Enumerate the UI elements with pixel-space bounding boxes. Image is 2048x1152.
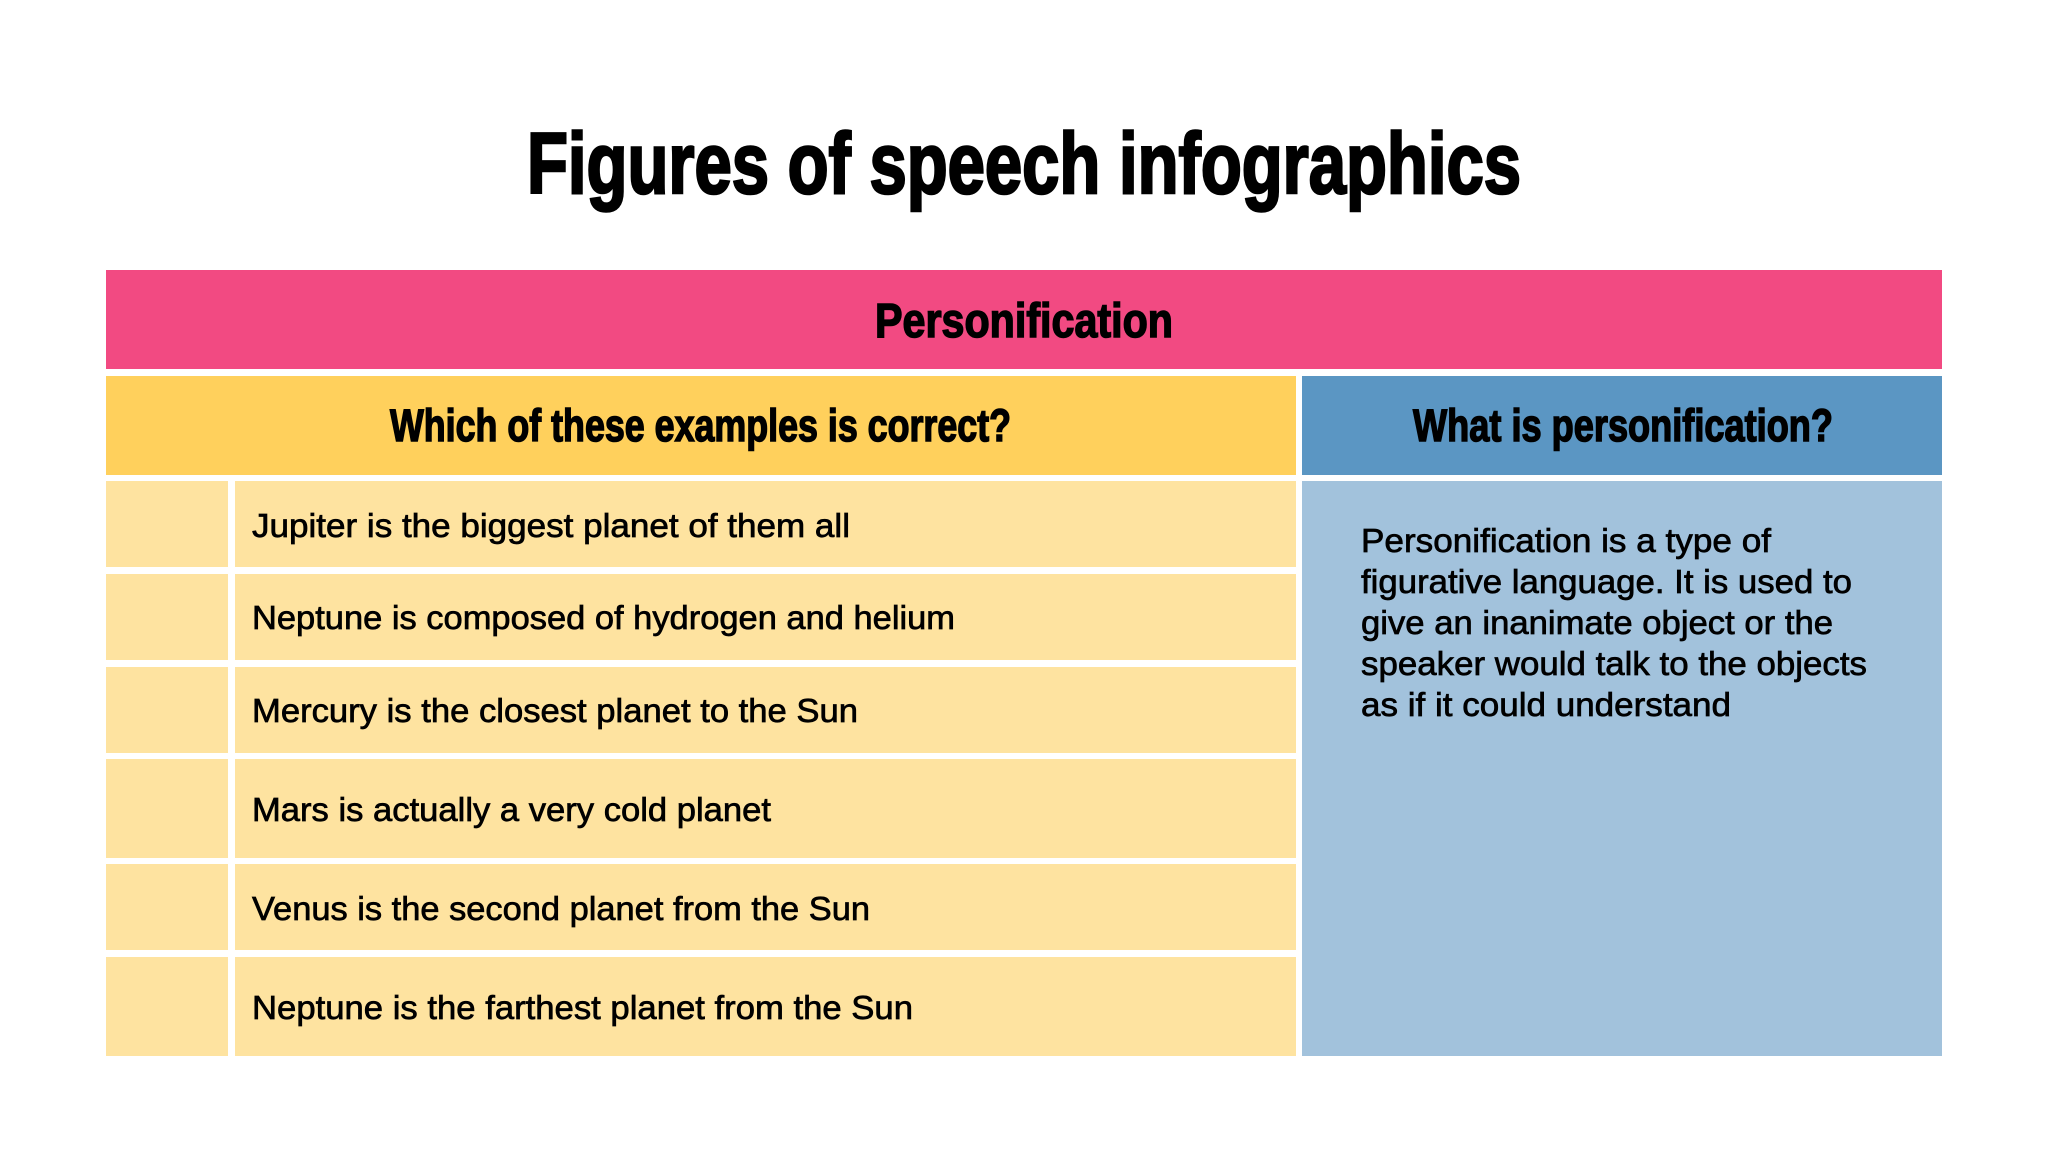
text block: definition: as if it could understand	[1361, 686, 1731, 723]
row: Venus	[106, 864, 1296, 950]
heading: personification: Personification	[875, 295, 1173, 348]
row: Mercury	[106, 667, 1296, 753]
row: Jupiter	[106, 481, 1296, 567]
text block: definition: figurative language. It is used to	[1361, 563, 1852, 600]
row: Neptune distance: Neptune is the farthest planet from the Sun	[252, 989, 913, 1026]
row: Mercury: Mercury is the closest planet to the Sun	[252, 692, 858, 729]
panel: examples header	[106, 376, 1296, 475]
text block: definition: Personification is a type of	[1361, 522, 1772, 559]
panel: definition header	[1302, 376, 1942, 475]
panel: personification header	[106, 270, 1942, 369]
heading: which example: Which of these examples is correct?	[390, 400, 1011, 451]
row: Neptune distance	[106, 957, 1296, 1056]
row: Jupiter: Jupiter is the biggest planet of them all	[252, 507, 850, 544]
row: Neptune composition	[106, 574, 1296, 660]
row: Mars: Mars is actually a very cold planet	[252, 791, 771, 828]
row: Mars	[106, 759, 1296, 858]
row: Venus: Venus is the second planet from the Sun	[252, 890, 870, 927]
text block: definition: speaker would talk to the objects	[1361, 645, 1867, 682]
title: Figures of speech infographics	[527, 116, 1521, 212]
text block: definition: give an inanimate object or the	[1361, 604, 1833, 641]
heading: what is personification: What is personification?	[1413, 400, 1833, 451]
panel: definition	[1302, 481, 1942, 1056]
row: Neptune composition: Neptune is composed of hydrogen and helium	[252, 599, 955, 636]
text block: definition	[1361, 522, 1867, 723]
